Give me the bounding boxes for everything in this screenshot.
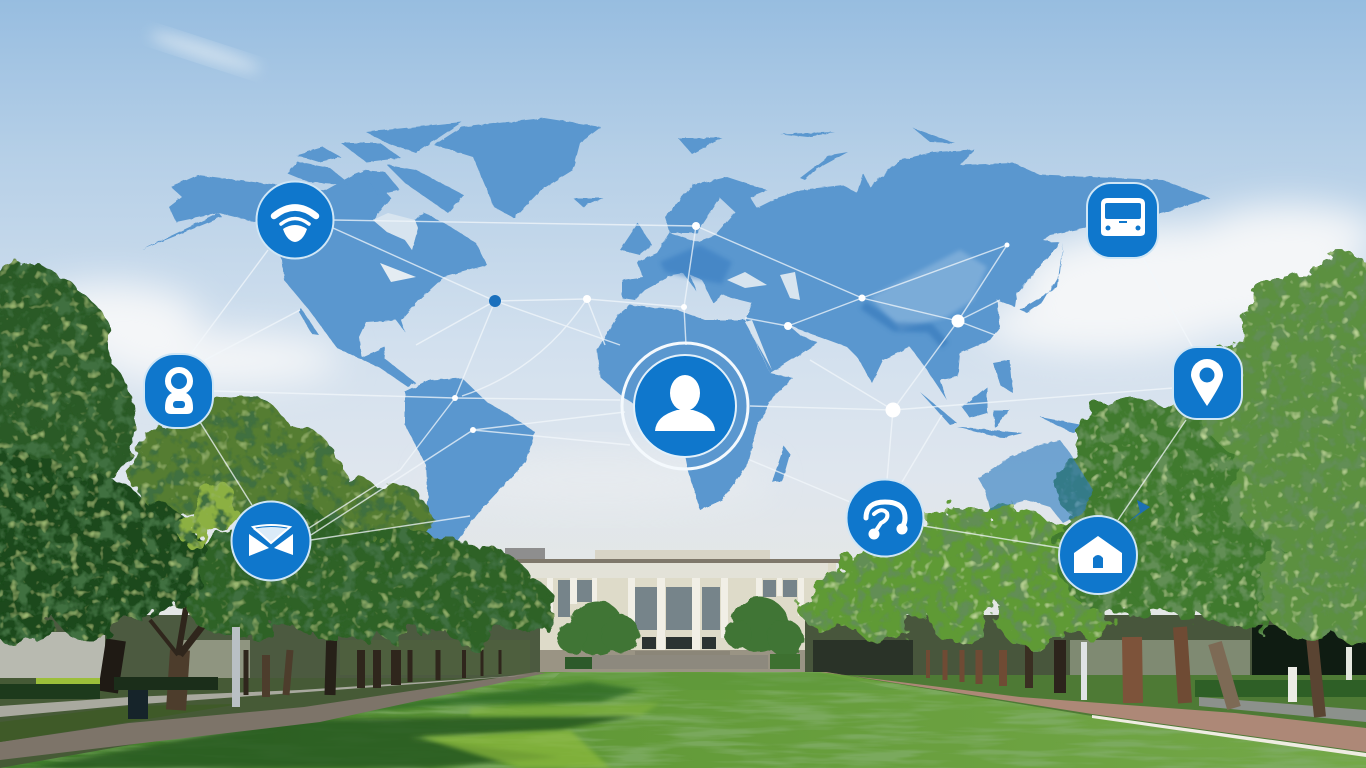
icon: bus	[1087, 183, 1158, 258]
trees right	[802, 255, 1366, 717]
white edge right	[1092, 715, 1366, 757]
icon: person lock	[144, 354, 213, 428]
region: Africa	[597, 305, 793, 510]
region: Greenland	[434, 118, 601, 218]
region: Japan	[1020, 243, 1063, 313]
network nodes	[452, 222, 1010, 433]
continent: North America	[169, 170, 487, 387]
foliage left	[0, 265, 555, 646]
tree trunks left	[108, 567, 500, 710]
region: Indonesia	[920, 392, 957, 425]
region: Australia overlay	[978, 440, 1150, 523]
building	[480, 548, 860, 672]
trees left	[0, 265, 555, 710]
icon: question network	[846, 480, 924, 556]
street props	[0, 627, 1352, 719]
region: Aleutians	[141, 213, 222, 250]
region: Svalbard	[678, 138, 722, 154]
center shrubs	[557, 597, 803, 669]
path right	[820, 672, 1366, 752]
walkway left	[0, 675, 530, 717]
lawn	[0, 665, 1366, 768]
ground backdrop left	[0, 615, 540, 768]
bin	[128, 685, 148, 719]
icon: home	[1059, 516, 1137, 594]
icon: central user	[622, 343, 748, 469]
region: Iceland	[573, 198, 603, 207]
tree trunks right	[928, 627, 1320, 717]
icon: location pin	[1173, 347, 1242, 419]
region: arctic islands	[366, 122, 462, 153]
world map	[141, 118, 1210, 578]
network connection lines	[190, 220, 1193, 548]
icon: wifi	[256, 182, 334, 258]
icon: envelope	[232, 502, 310, 580]
region: South America	[405, 378, 535, 578]
ground backdrop right	[805, 615, 1366, 768]
path left	[0, 672, 546, 760]
region: Eurasia	[622, 150, 1210, 400]
region: Baja	[299, 308, 319, 335]
steps	[480, 650, 860, 672]
region: British Isles	[620, 223, 652, 255]
grass strip left	[0, 704, 240, 742]
clouds	[20, 26, 1366, 510]
foliage right	[802, 255, 1366, 648]
region: inland seas and map shading	[373, 213, 987, 370]
